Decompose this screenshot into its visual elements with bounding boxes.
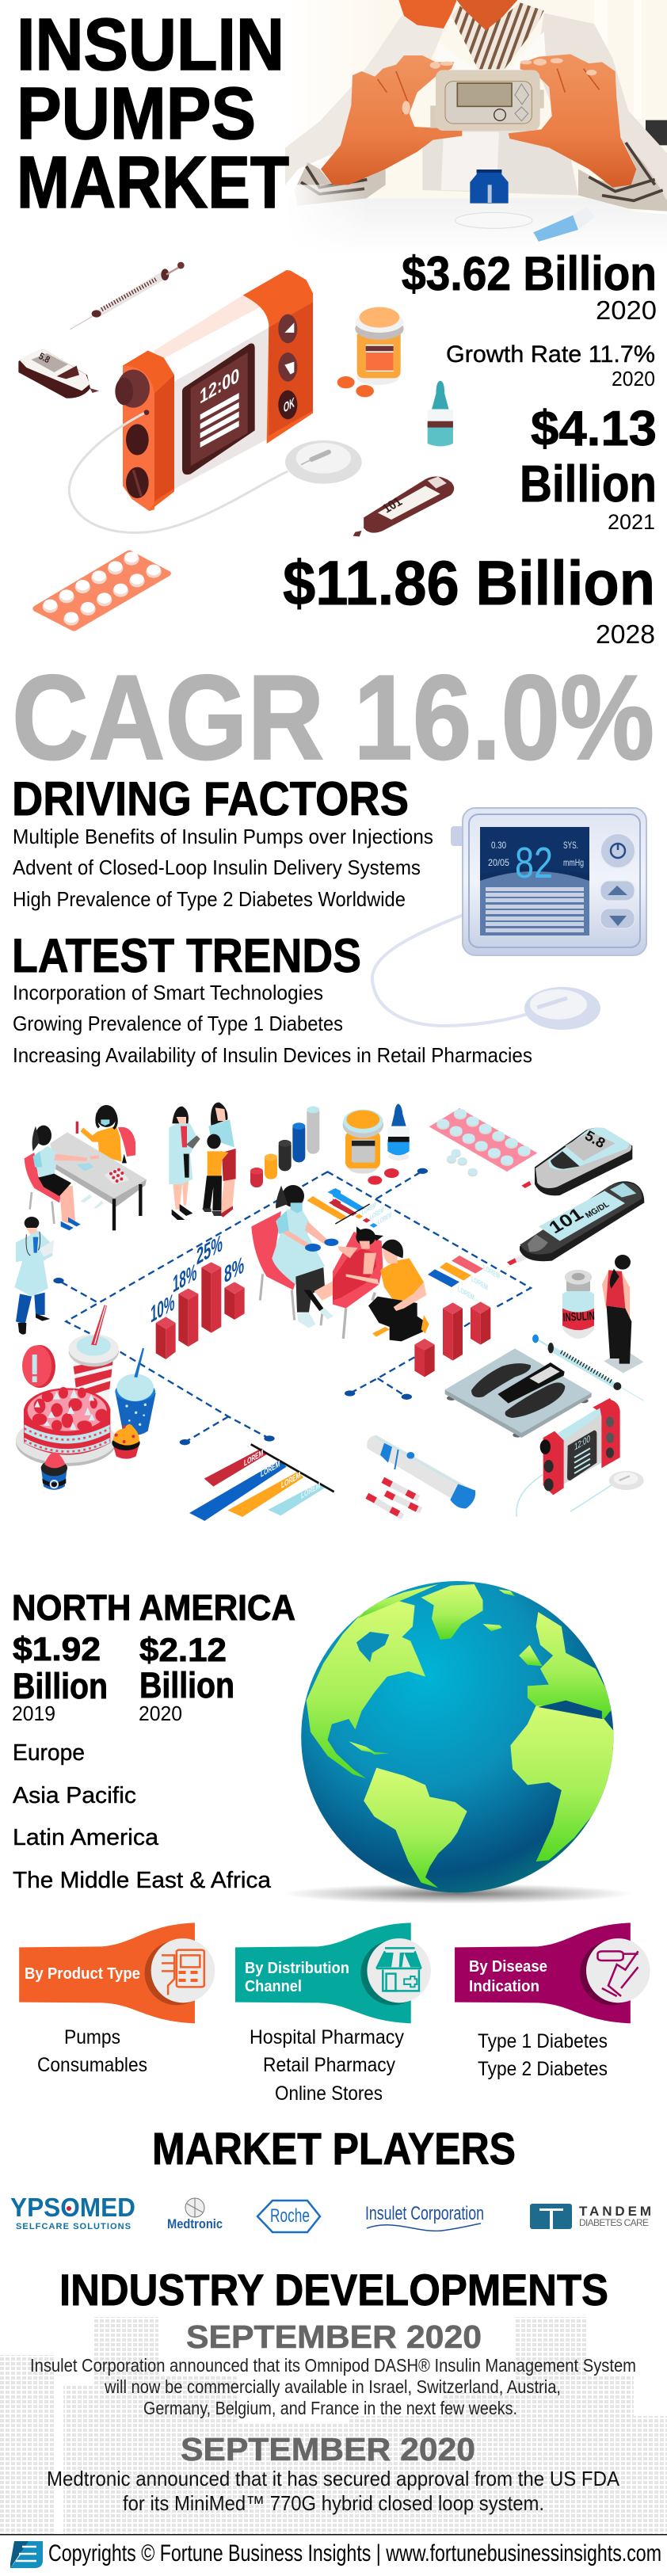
illustration: orange insulin pump with accessories xyxy=(18,262,454,631)
device and legend labels: INSULIN xyxy=(562,1309,595,1324)
strawberry cake xyxy=(16,1387,116,1466)
standing woman on scale xyxy=(602,1255,643,1373)
girl on chair with father xyxy=(333,1226,429,1341)
weighing scale xyxy=(445,1348,592,1438)
development 1: SEPTEMBER 2020 xyxy=(186,2319,482,2355)
illustration: orange insulin pump with accessories: 12:00 xyxy=(200,364,239,409)
other regions list: Asia Pacific xyxy=(13,1783,136,1808)
other regions list: Europe xyxy=(13,1740,85,1766)
illustration: orange insulin pump with accessories: 101 xyxy=(379,494,405,516)
logo: Medtronic xyxy=(167,2198,223,2231)
market size figures: 2020 xyxy=(596,295,657,325)
latest trends: Incorporation of Smart Technologies xyxy=(13,981,323,1004)
hero photo: woman holding insulin pump xyxy=(285,0,667,253)
illustration: blue insulin pump device: 0.30 xyxy=(491,840,506,851)
device and legend labels: LOREM xyxy=(281,1470,300,1491)
cylinder bars xyxy=(250,1107,319,1187)
isometric diabetes-care illustration xyxy=(14,1103,644,1521)
device and legend labels: 12:00 xyxy=(574,1432,590,1453)
banner: by distribution channel: By Distribution xyxy=(245,1960,349,1977)
banner: by disease indication: By Disease xyxy=(469,1958,547,1976)
city skyline background xyxy=(0,2317,667,2535)
list: distribution channels: Hospital Pharmacy xyxy=(250,2026,404,2048)
market size figures: $4.13 xyxy=(531,402,657,456)
regional section: North America: Billion xyxy=(139,1665,234,1705)
banner: by disease indication xyxy=(455,1922,650,2023)
development 2: for its MiniMed™ 770G hybrid closed loop system. xyxy=(123,2491,544,2515)
doctor with mother and child xyxy=(169,1103,236,1220)
percentage labels: 8% xyxy=(224,1252,244,1289)
device and legend labels: LOREM xyxy=(483,1263,500,1282)
connector dots right xyxy=(345,1168,428,1400)
device and legend labels: LOREM xyxy=(370,1206,383,1221)
banner: by disease indication: Indication xyxy=(469,1978,539,1995)
dashed connector lines right xyxy=(327,1171,531,1397)
latest trends: Growing Prevalence of Type 1 Diabetes xyxy=(13,1012,343,1035)
list: disease indications: Type 2 Diabetes xyxy=(478,2058,608,2080)
regional section: North America: NORTH AMERICA xyxy=(12,1587,295,1628)
driving factors: Multiple Benefits of Insulin Pumps over Injections xyxy=(13,825,433,848)
device and legend labels: LOREM xyxy=(362,1201,375,1217)
seated nurse xyxy=(251,1185,341,1328)
globe xyxy=(283,1581,631,1903)
title: PUMPS xyxy=(17,72,256,154)
banner: by product type xyxy=(19,1922,215,2023)
market size figures: Growth Rate 11.7% xyxy=(446,341,655,368)
glucose meter 5.8 xyxy=(521,1127,632,1195)
title xyxy=(17,3,289,223)
illustration: orange insulin pump with accessories: 5.8 xyxy=(37,350,52,365)
development 1: Germany, Belgium, and France in the next few weeks. xyxy=(143,2398,517,2418)
regional section: North America: 2019 xyxy=(12,1701,55,1725)
device and legend labels: 5.8 xyxy=(582,1127,608,1151)
blue cup xyxy=(115,1348,156,1435)
logo: Ypsomed: SELFCARE SOLUTIONS xyxy=(16,2222,131,2231)
market players heading: MARKET PLAYERS xyxy=(152,2124,516,2174)
regional section: North America xyxy=(12,1587,295,1725)
industry developments heading: INDUSTRY DEVELOPMENTS xyxy=(59,2265,608,2315)
development 2: SEPTEMBER 2020 xyxy=(181,2431,475,2467)
development 1 xyxy=(30,2319,636,2418)
syringe xyxy=(532,1335,644,1400)
device and legend labels: LOREM xyxy=(378,1210,391,1226)
list: distribution channels: Online Stores xyxy=(275,2083,383,2105)
logo: Roche xyxy=(257,2201,320,2232)
dashed connector lines left xyxy=(59,1172,327,1442)
driving factors: High Prevalence of Type 2 Diabetes Worldwide xyxy=(13,887,406,911)
red pills xyxy=(368,1168,399,1185)
red 3D bar chart right xyxy=(414,1301,490,1377)
other regions list: The Middle East & Africa xyxy=(13,1868,272,1893)
connector dots left xyxy=(53,1278,275,1445)
illustration: blue insulin pump device: SYS. xyxy=(563,840,578,851)
legend bars right xyxy=(333,1189,483,1287)
driving factors: Advent of Closed-Loop Insulin Delivery Systems xyxy=(13,855,421,879)
driving factors: DRIVING FACTORS xyxy=(12,772,409,825)
illustration: blue insulin pump device: mmHg xyxy=(563,857,584,868)
logo: Roche: Roche xyxy=(270,2205,310,2227)
list: disease indications: Type 1 Diabetes xyxy=(478,2030,608,2052)
warning icon xyxy=(22,1345,55,1388)
bar legend bottom xyxy=(189,1444,334,1521)
table scene xyxy=(25,1105,147,1230)
list: product types: Pumps xyxy=(64,2026,120,2048)
list: distribution channels: Retail Pharmacy xyxy=(263,2054,395,2076)
percentage labels xyxy=(151,1230,244,1328)
latest trends: Increasing Availability of Insulin Devices in Retail Pharmacies xyxy=(13,1043,532,1067)
device and legend labels: MG/DL xyxy=(583,1199,612,1220)
legend bars near nurse xyxy=(307,1188,341,1220)
percentage labels: 10% xyxy=(151,1289,174,1328)
device and legend labels: LOREM xyxy=(244,1448,263,1469)
regional section: North America: 2020 xyxy=(139,1701,182,1725)
device and legend labels: LOREM xyxy=(261,1459,280,1480)
list: product types: Consumables xyxy=(37,2054,147,2076)
market size figures: 2028 xyxy=(596,619,655,649)
soda cup xyxy=(69,1305,119,1404)
regional section: North America: $2.12 xyxy=(139,1631,227,1668)
doctor on left xyxy=(14,1217,54,1335)
banner: by distribution channel xyxy=(235,1922,431,2023)
other regions list xyxy=(13,1740,272,1893)
device and legend labels: LOREM xyxy=(458,1285,475,1303)
percentage labels: 25% xyxy=(196,1230,223,1271)
latest trends xyxy=(12,929,532,1067)
cupcakes xyxy=(41,1424,140,1490)
illustration: blue insulin pump device xyxy=(372,808,646,1030)
red insulin pump xyxy=(516,1398,644,1517)
device and legend labels xyxy=(244,1127,612,1501)
list: product types xyxy=(37,2026,147,2076)
logo: Tandem Diabetes Care xyxy=(530,2204,651,2229)
title: INSULIN xyxy=(17,3,284,86)
logo: Medtronic: Medtronic xyxy=(167,2216,223,2231)
list: disease indications xyxy=(478,2030,608,2080)
logo: Insulet Corporation: Insulet Corporation xyxy=(365,2203,484,2224)
other regions list: Latin America xyxy=(13,1825,159,1850)
red 3D bar chart left xyxy=(156,1262,245,1359)
development 2 xyxy=(47,2431,620,2515)
logo: Insulet Corporation xyxy=(365,2203,484,2231)
pink blister pack xyxy=(429,1108,537,1176)
market size figures: 2020 xyxy=(612,367,655,391)
logo: Ypsomed: YPSOMED xyxy=(10,2193,135,2222)
device and legend labels: LOREM xyxy=(471,1275,488,1293)
insulin vial xyxy=(562,1270,594,1339)
device and legend labels: LOREM xyxy=(301,1480,320,1501)
market size figures: 2021 xyxy=(608,510,655,534)
title: MARKET xyxy=(17,141,289,223)
list: distribution channels xyxy=(250,2026,404,2105)
medicine bottle xyxy=(343,1110,383,1174)
test strips xyxy=(367,1480,421,1517)
illustration: blue insulin pump device: 20/05 xyxy=(488,857,509,868)
illustration: blue insulin pump device: 82 xyxy=(515,838,553,887)
logo: Tandem Diabetes Care: TANDEM xyxy=(579,2204,651,2219)
banner: by product type: By Product Type xyxy=(25,1965,140,1983)
regional section: North America: $1.92 xyxy=(13,1630,101,1667)
device and legend labels: 101 xyxy=(545,1204,587,1237)
insulin pen xyxy=(367,1435,475,1508)
glucose meter 101 xyxy=(507,1181,644,1265)
driving factors xyxy=(12,772,433,911)
footer logo xyxy=(10,2541,43,2568)
regional section: North America: Billion xyxy=(13,1666,108,1706)
illustration: orange insulin pump with accessories: OK xyxy=(284,394,295,416)
logo: Tandem Diabetes Care: DIABETES CARE xyxy=(579,2217,649,2228)
latest trends: LATEST TRENDS xyxy=(12,929,361,982)
development 2: Medtronic announced that it has secured approval from the US FDA xyxy=(47,2467,620,2490)
percentage labels: 18% xyxy=(173,1259,196,1298)
dropper bottle xyxy=(387,1103,410,1160)
market size figures xyxy=(283,247,657,649)
banner: by distribution channel: Channel xyxy=(245,1978,302,1995)
development 1: will now be commercially available in Israel, Switzerland, Austria, xyxy=(104,2376,561,2397)
